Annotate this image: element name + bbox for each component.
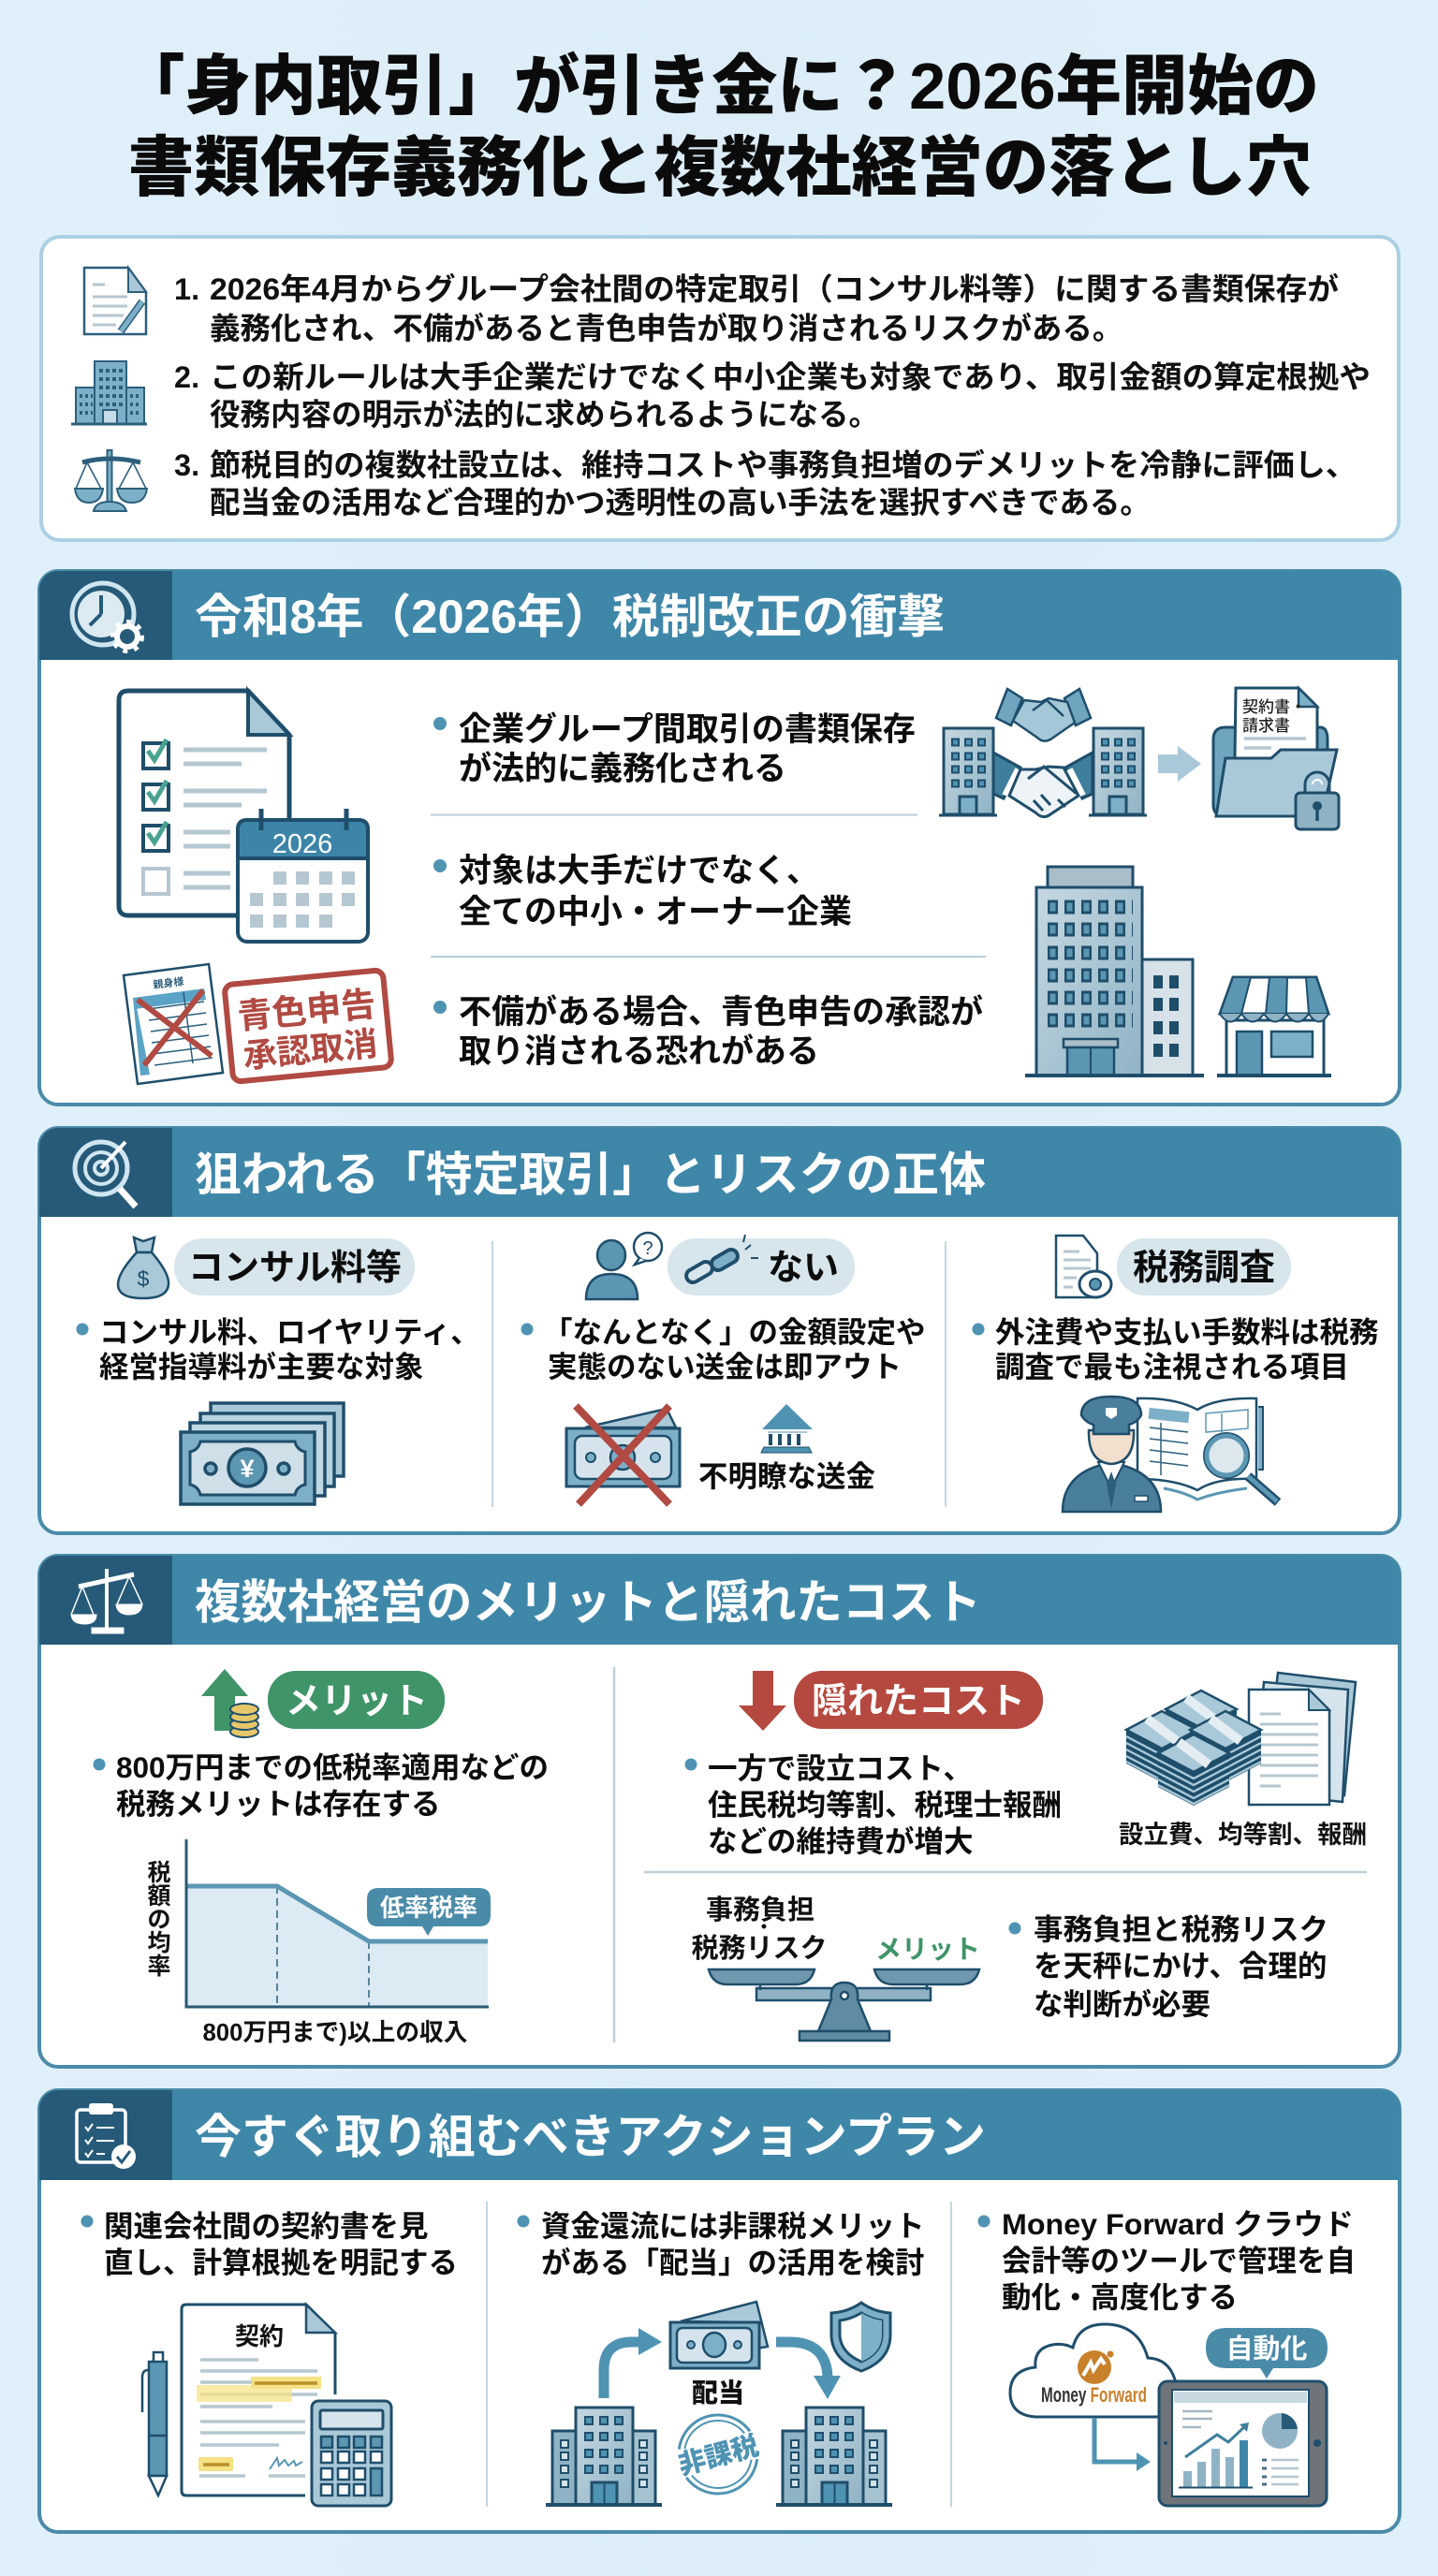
bullet list: 企業グループ間取引の書類保存 xyxy=(459,711,916,748)
icon: crossed-out tax form: 親身様 xyxy=(153,974,184,991)
text block: 経営指導料が主要な対象 xyxy=(99,1350,424,1383)
panel: benefits and hidden costs xyxy=(39,1556,1400,2067)
pill label: benefit: メリット xyxy=(286,1682,428,1721)
text block: three key points: この新ルールは大手企業だけでなく中小企業も対象であり、取引金額の算定根拠や xyxy=(210,360,1371,394)
text block: 調査で最も注視される項目 xyxy=(995,1350,1349,1383)
icon: bank xyxy=(761,1404,813,1453)
icon: up arrow and coins xyxy=(201,1669,258,1737)
text block xyxy=(94,1750,549,1821)
section header: 今すぐ取り組むべきアクションプラン xyxy=(195,2111,986,2163)
balance comparison: メリット xyxy=(875,1935,980,1964)
text block: 動化・高度化する xyxy=(1002,2280,1238,2314)
pill label: hidden cost xyxy=(794,1671,1043,1729)
text block xyxy=(77,1315,480,1383)
text block xyxy=(977,2207,1356,2314)
icon: balance xyxy=(71,1569,142,1633)
icon: bundled cash xyxy=(1126,1690,1261,1806)
icon: locked folder with contracts: 請求書 xyxy=(1242,717,1290,735)
chart: effective tax rate: の xyxy=(147,1907,171,1933)
icon: pen xyxy=(142,2352,167,2496)
icon: right company xyxy=(776,2408,892,2505)
column: automation xyxy=(977,2207,1356,2506)
balance comparison: 事務負担 xyxy=(706,1895,814,1925)
chart: effective tax rate: 800万円まで)以上の収入 xyxy=(202,2018,468,2046)
callout: automation xyxy=(1206,2328,1328,2378)
stamp: blue return approval revoked: 青色申告 xyxy=(236,985,377,1036)
text block: 実態のない送金は即アウト xyxy=(548,1350,902,1383)
icon: shield xyxy=(831,2303,890,2371)
text block: 直し、計算根拠を明記する xyxy=(104,2246,458,2279)
section header xyxy=(39,571,1400,660)
text block: 「なんとなく」の金額設定や xyxy=(543,1315,926,1349)
pill label xyxy=(668,1235,855,1295)
chart: effective tax rate: 額 xyxy=(147,1883,171,1910)
text block: 税務メリットは存在する xyxy=(116,1787,441,1821)
section header xyxy=(39,1128,1400,1217)
icon: document with eye xyxy=(1056,1236,1111,1297)
icon: checklist document xyxy=(119,691,289,915)
icon: target magnifier xyxy=(75,1142,136,1207)
chart: effective tax rate: 率 xyxy=(147,1954,171,1980)
column: benefits xyxy=(94,1669,549,2046)
panel: tax reform impact xyxy=(39,571,1400,1105)
pill label: benefit xyxy=(268,1671,445,1729)
icon: stack of yen bills: ¥ xyxy=(240,1455,255,1483)
text block: 会計等のツールで管理を自 xyxy=(1002,2244,1356,2277)
text block: 外注費や支払い手数料は税務 xyxy=(995,1315,1379,1349)
icon: money bag: $ xyxy=(138,1266,150,1291)
icon: bill xyxy=(670,2302,768,2368)
icon: 2026 calendar: 2026 xyxy=(272,829,332,859)
stamp: tax free xyxy=(674,2410,762,2498)
icon: clipboard checklist xyxy=(77,2103,136,2169)
panel: summary xyxy=(41,237,1399,540)
caption: 設立費、均等割、報酬 xyxy=(1119,1821,1367,1849)
text block: three key points: 2. xyxy=(174,360,199,394)
text block xyxy=(517,2209,925,2279)
panel: action plan xyxy=(39,2090,1400,2532)
column: consulting fees xyxy=(77,1237,480,1504)
icon: small shop xyxy=(1217,977,1331,1076)
icon: clock and gear xyxy=(72,583,142,651)
section header: 令和8年（2026年）税制改正の衝撃 xyxy=(195,591,945,643)
icon: crossed-out bill xyxy=(566,1406,680,1504)
arrow xyxy=(1158,746,1201,782)
text block: コンサル料、ロイヤリティ、 xyxy=(99,1315,480,1349)
text block: three key points: 役務内容の明示が法的に求められるようになる。 xyxy=(210,397,879,432)
text block: three key points: 配当金の活用など合理的かつ透明性の高い手法を選択すべきである。 xyxy=(210,486,1151,520)
stamp: tax free: 非課税 xyxy=(675,2430,762,2481)
icon: document and pen xyxy=(84,268,146,334)
text block: 事務負担と税務リスク xyxy=(1034,1912,1328,1946)
callout: automation: 自動化 xyxy=(1225,2334,1308,2364)
label: dividend: 配当 xyxy=(692,2378,744,2408)
caption: 不明瞭な送金 xyxy=(698,1459,875,1493)
panel: specific transactions and risk xyxy=(39,1128,1400,2532)
pill label: hidden cost: 隠れたコスト xyxy=(812,1682,1025,1721)
bullet list: 不備がある場合、青色申告の承認が xyxy=(459,994,983,1031)
icon: left company xyxy=(546,2408,662,2505)
text block xyxy=(81,2209,458,2279)
text block: three key points: 3. xyxy=(174,448,199,482)
chart: effective tax rate: 均 xyxy=(147,1930,171,1956)
text block: 800万円までの低税率適用などの xyxy=(116,1750,549,1784)
icon: locked folder with contracts: 契約書・ xyxy=(1242,698,1306,716)
text block: three key points: 義務化され、不備があると青色申告が取り消されるリスクがある。 xyxy=(210,311,1123,345)
column: tax audit xyxy=(972,1236,1379,1512)
section header: 狙われる「特定取引」とリスクの正体 xyxy=(195,1149,986,1201)
text block: がある「配当」の活用を検討 xyxy=(541,2246,925,2279)
section header xyxy=(39,2090,1400,2180)
icon: calculator xyxy=(312,2401,391,2506)
bullet list: が法的に義務化される xyxy=(459,751,786,787)
icon: auditor with open book and magnifier xyxy=(1063,1397,1278,1512)
bullet list xyxy=(431,711,986,1070)
callout: low rate: 低率税率 xyxy=(380,1894,477,1922)
section header: 複数社経営のメリットと隠れたコスト xyxy=(195,1576,981,1629)
text block: 資金還流には非課税メリット xyxy=(541,2209,925,2243)
stamp: blue return approval revoked: 承認取消 xyxy=(242,1024,379,1076)
icon: crossed-out tax form xyxy=(124,964,223,1084)
bullet list: 全ての中小・オーナー企業 xyxy=(459,894,852,930)
balance comparison xyxy=(691,1895,980,2041)
text block: three key points: 1. xyxy=(174,272,199,306)
stamp: blue return approval revoked xyxy=(224,970,392,1082)
icon: office tower xyxy=(1025,867,1204,1076)
arrow: cloud to tablet xyxy=(1094,2418,1151,2471)
icon: contract: 契約 xyxy=(235,2322,284,2350)
icon: questioning person: ? xyxy=(642,1238,653,1259)
text block: Money Forward クラウド xyxy=(1002,2207,1354,2241)
balance comparison: 税務リスク xyxy=(691,1933,828,1964)
callout: low rate xyxy=(367,1888,491,1936)
icon: scales xyxy=(75,449,147,511)
icon: tablet dashboard xyxy=(1159,2381,1327,2506)
text block: 住民税均等割、税理士報酬 xyxy=(708,1788,1062,1822)
arrow: flow down xyxy=(776,2342,841,2399)
icon: documents xyxy=(1249,1673,1356,1805)
bullet list: 取り消される恐れがある xyxy=(459,1033,819,1070)
icon: broken chain xyxy=(684,1235,758,1285)
text block: three key points xyxy=(174,271,1371,520)
icon: down arrow xyxy=(739,1671,786,1731)
pill label xyxy=(1117,1238,1291,1295)
chart: effective tax rate xyxy=(147,1839,491,2046)
icon: contract xyxy=(182,2305,335,2496)
title: 「身内取引」が引き金に？2026年開始の xyxy=(119,50,1319,123)
title: 書類保存義務化と複数社経営の落とし穴 xyxy=(128,131,1312,204)
text block: を天秤にかけ、合理的 xyxy=(1034,1949,1327,1983)
text block: 関連会社間の契約書を見 xyxy=(104,2209,429,2243)
icon: money bag xyxy=(118,1237,169,1298)
text block: 一方で設立コスト、 xyxy=(708,1751,973,1785)
icon: Money Forward cloud xyxy=(1010,2324,1176,2417)
text block: three key points: 2026年4月からグループ会社間の特定取引（コンサル料等）に関する書類保存が xyxy=(210,271,1339,306)
column: hidden costs xyxy=(685,1671,1367,2041)
pill label: 税務調査 xyxy=(1133,1249,1275,1288)
icon: 2026 calendar xyxy=(238,809,368,942)
pill label: ない xyxy=(768,1249,839,1288)
pill label xyxy=(174,1238,415,1295)
bullet list: 対象は大手だけでなく、 xyxy=(459,853,819,889)
text block: three key points: 節税目的の複数社設立は、維持コストや事務負担増のデメリットを冷静に評価し、 xyxy=(210,447,1357,482)
column: no basis xyxy=(521,1233,1379,1512)
text block: な判断が必要 xyxy=(1034,1987,1211,2021)
icon: buildings and handshakes xyxy=(939,689,1201,817)
text block xyxy=(972,1315,1379,1383)
text block xyxy=(521,1315,926,1383)
column: dividends xyxy=(517,2209,925,2505)
icon: locked folder with contracts xyxy=(1213,688,1339,829)
icon: Money Forward cloud: Money Forward xyxy=(1041,2383,1147,2407)
icon: questioning person xyxy=(586,1233,662,1299)
text block: などの維持費が増大 xyxy=(708,1824,974,1858)
icon: stack of yen bills xyxy=(181,1403,344,1504)
arrow: flow up xyxy=(604,2328,662,2398)
title xyxy=(119,50,1319,204)
icon: office building xyxy=(71,361,147,424)
section header xyxy=(39,1556,1400,1645)
text block xyxy=(1009,1912,1328,2021)
column: contracts xyxy=(81,2209,458,2506)
pill label: コンサル料等 xyxy=(188,1249,402,1288)
chart: effective tax rate: 税 xyxy=(147,1860,171,1886)
text block xyxy=(685,1751,1062,1858)
